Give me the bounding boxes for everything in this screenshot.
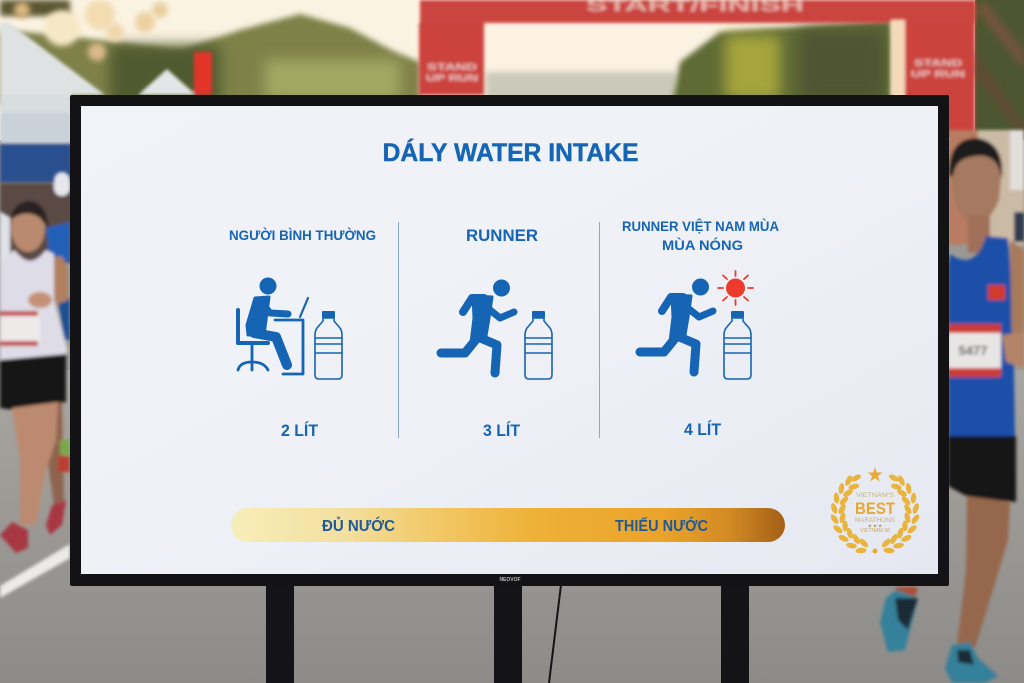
value: 4 litres: 4 LÍT: [684, 420, 722, 439]
background: white tents: [0, 22, 212, 183]
laurel wreath: [829, 473, 921, 554]
screen stand: poles and cable: [266, 585, 749, 683]
background: start finish arch: UP RUN: [911, 69, 965, 79]
background: start finish arch: STAND: [427, 62, 478, 72]
display bezel: [70, 95, 949, 586]
background: right runner: 5477: [959, 343, 987, 358]
value: 3 litres: 3 LÍT: [483, 421, 521, 440]
divider right: [599, 222, 600, 438]
icon: water bottle: [315, 311, 342, 379]
background: start finish arch: [419, 0, 976, 139]
heading: normal person: NGƯỜI BÌNH THƯỜNG: [229, 226, 376, 243]
label: dehydrated: THIẾU NƯỚC: [615, 516, 708, 535]
badge text: ★ ★ ★: [868, 523, 882, 528]
divider left: [398, 222, 399, 438]
display panel: [81, 106, 938, 574]
icon: star: [868, 467, 882, 482]
heading: Vietnamese runner: RUNNER VIỆT NAM MÙA: [622, 217, 779, 234]
badge text: MARATHONS: [855, 517, 896, 524]
background: start finish arch: UP RUN: [426, 73, 478, 83]
bezel logo: NEOVOF: [499, 577, 521, 583]
column: runner: [441, 226, 552, 440]
heading: Vietnamese runner: MÙA NÓNG: [662, 236, 743, 253]
icon: sun: [718, 271, 753, 305]
badge text: BEST: [855, 499, 896, 518]
heading: runner: RUNNER: [466, 226, 538, 245]
icon: person at desk: [238, 278, 308, 374]
hydration gradient bar: [231, 508, 785, 542]
title: DÁLY WATER INTAKE: [382, 138, 638, 167]
badge: gold laurel award: [829, 467, 921, 554]
background: right runner: [880, 130, 1024, 683]
badge text: VIETNAM'S: [856, 493, 894, 499]
icon: runner: [441, 280, 514, 373]
icon: runner: [640, 278, 713, 372]
label: hydrated: ĐỦ NƯỚC: [322, 516, 395, 535]
value: 2 litres: 2 LÍT: [281, 421, 319, 440]
column: Vietnamese runner in hot season: [622, 217, 779, 439]
icon: water bottle: [724, 311, 751, 379]
badge text: [855, 493, 896, 534]
badge text: VIETNAM 98: [860, 528, 890, 534]
background: start finish arch: STAND: [914, 58, 963, 68]
heading: Vietnamese runner: [622, 217, 779, 253]
background: left runners: [0, 172, 72, 553]
icon: water bottle: [525, 311, 552, 379]
column: normal person: [229, 226, 376, 440]
